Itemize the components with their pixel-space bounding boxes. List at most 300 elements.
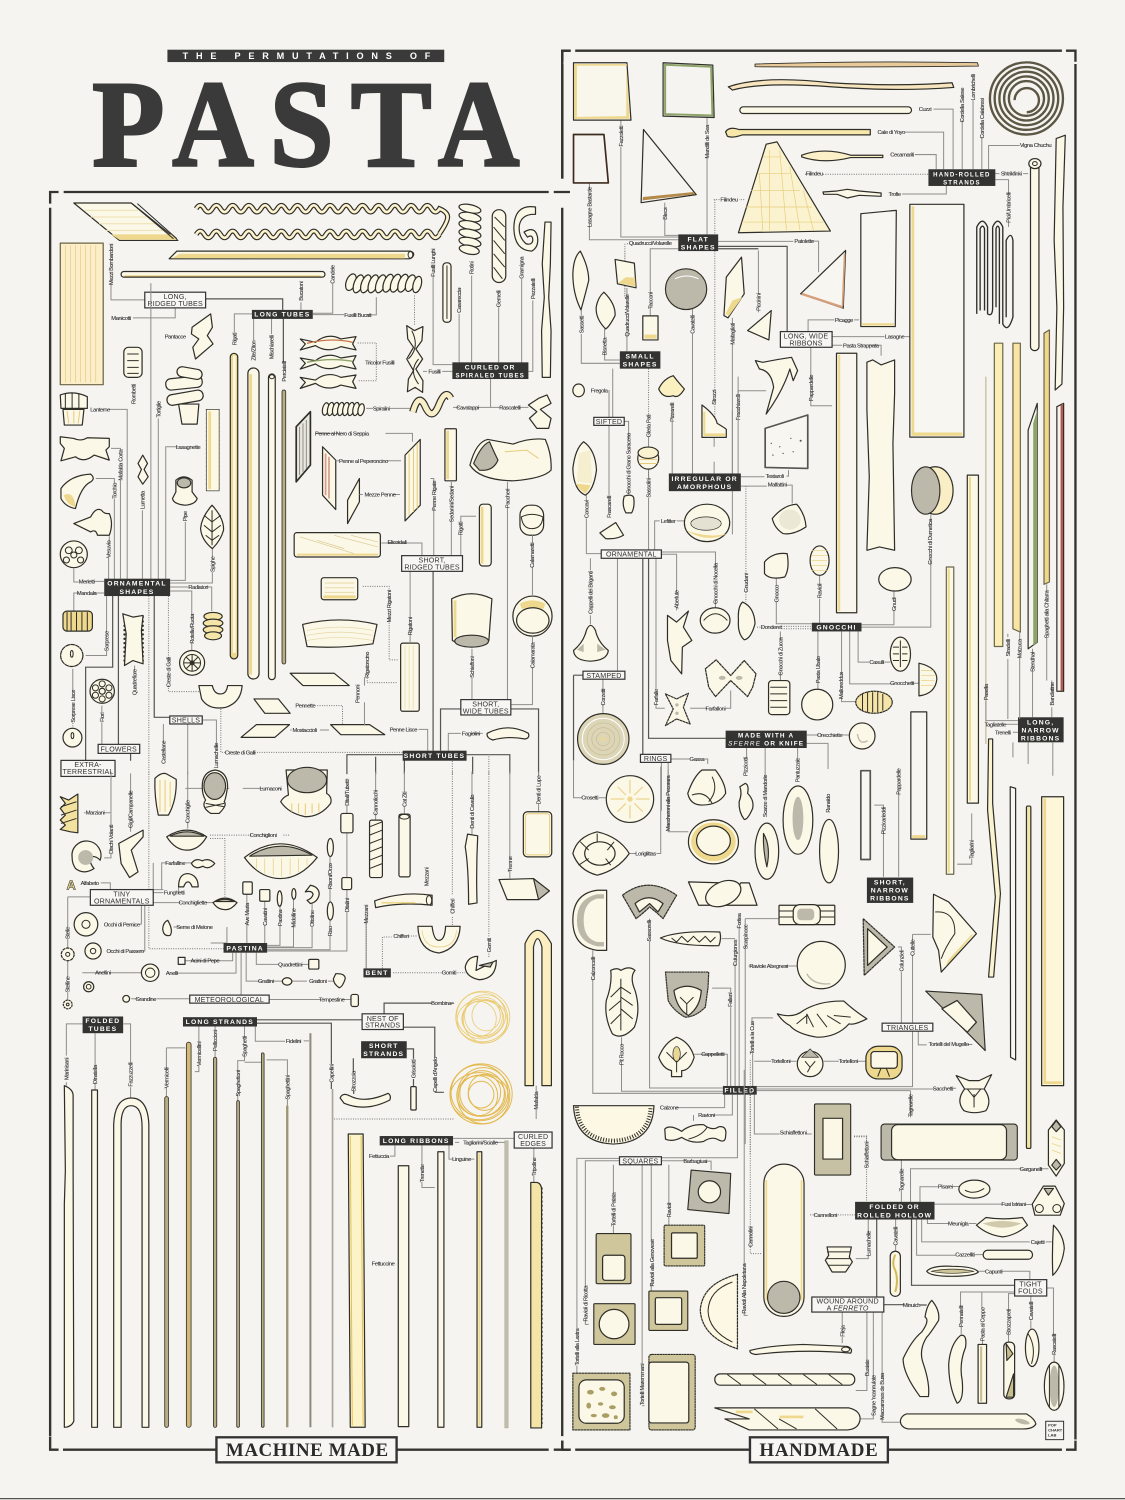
pasta: malloreddus xyxy=(856,691,892,713)
label: long wide ribbons: RIBBONS xyxy=(789,340,823,347)
pasta: calzoncelli D xyxy=(573,890,607,950)
labels: lower left: Capelli d'Angelo xyxy=(433,1057,439,1092)
pasta: raviole abegnesi xyxy=(797,941,845,989)
strands: dinatella xyxy=(92,1090,97,1427)
label: curled or spiraled tubes: SPIRALED TUBES xyxy=(455,373,525,379)
dotted: filindeu xyxy=(625,174,928,417)
pasta: gnocchetti xyxy=(919,663,937,696)
label: bent xyxy=(363,968,391,977)
pasta: alfabeto: A xyxy=(66,878,76,893)
labels: lower left: Stelline xyxy=(66,976,72,992)
labels: handmade bottom: Tortelli alla Lastra xyxy=(575,1328,581,1366)
labels: handmade bottom: Sagne 'ncannulate xyxy=(871,1375,877,1416)
panel: handmade upper middle xyxy=(573,330,1064,874)
labels: handmade top: Cuzzi xyxy=(919,107,931,113)
strand: cale xyxy=(726,128,870,137)
pasta: gnudani xyxy=(738,602,755,640)
pasta: manicotti xyxy=(60,243,103,385)
labels: upper left: Bucatoni xyxy=(299,282,305,301)
labels: lower left: Spaghettoni xyxy=(236,1070,242,1096)
ribbon: picagge xyxy=(861,210,896,327)
dotted: filled xyxy=(750,1095,867,1154)
label: nest of strands xyxy=(362,1014,403,1030)
labels: handmade bottom: Cannolini xyxy=(748,1227,754,1247)
connectors: filled xyxy=(574,760,972,1144)
labels: upper left: Fusilli xyxy=(428,369,441,375)
labels: handmade top: Sassetti xyxy=(579,316,585,333)
label: meteorological: METEOROLOGICAL xyxy=(195,997,264,1004)
pasta: busiate xyxy=(715,1374,855,1385)
label: bent: BENT xyxy=(365,970,389,977)
pasta: sorprese lisce xyxy=(63,728,82,747)
strands: marinisani xyxy=(64,1086,74,1427)
dark connector: flat shapes xyxy=(718,246,787,332)
labels: middle left: Elicoidali xyxy=(387,540,406,546)
pasta: sassorelli fan xyxy=(623,885,677,919)
connectors: hand-rolled xyxy=(808,100,1028,406)
label: irregular or amorphous: IRREGULAR OR xyxy=(671,476,738,483)
labels: handmade bottom: Fileja xyxy=(840,1324,846,1337)
labels: middle left: Penne al Nero di Seppia xyxy=(315,431,370,437)
dotted: lumaconi and conchiglie xyxy=(149,772,489,973)
pasta: pizzarelli xyxy=(659,376,684,397)
labels: lower left: Grandine xyxy=(135,997,156,1003)
dark connectors: folded to ferreto xyxy=(877,1220,1015,1305)
label: tight folds xyxy=(1015,1280,1047,1296)
pasta: fagiolini xyxy=(487,728,529,740)
labels: middle left: Quadrefiore xyxy=(133,669,139,695)
labels: handmade top: Cale di Yoyo xyxy=(878,130,905,136)
label: made with a sferre or knife: MADE WITH A xyxy=(738,733,794,740)
pasta: tagnarelle xyxy=(881,1124,1017,1160)
pasta: concavi xyxy=(573,442,597,495)
pasta: rigatoni xyxy=(479,504,491,566)
labels: middle left: Mostaccioli xyxy=(293,728,317,734)
pasta: tortelli alla lastra xyxy=(573,1373,630,1430)
ribbon: stradelli xyxy=(994,343,1003,646)
labels: handmade lower middle: Tortelli del Mugello xyxy=(929,1042,969,1048)
labels: middle left: Lumetta xyxy=(140,490,146,509)
labels: handmade lower middle: Culurgiones xyxy=(733,939,739,966)
pasta: gnocchi di zucca xyxy=(769,681,790,715)
pasta: bucatoni tube xyxy=(169,251,414,259)
labels: lower left: Conchigliette xyxy=(179,901,207,907)
labels: middle left: Tortiglie xyxy=(156,401,162,417)
strand: second xyxy=(728,80,954,90)
pasta: pantacce xyxy=(191,314,213,359)
pasta: ravioli oval xyxy=(810,546,829,575)
labels: handmade bottom xyxy=(575,1131,1058,1420)
ribbon: fettuccine xyxy=(398,1166,409,1427)
label: folded or rolled hollow: ROLLED HOLLOW xyxy=(857,1213,932,1220)
pasta: tortiglie stack xyxy=(165,366,204,424)
title: PASTA xyxy=(92,56,519,192)
labels: lower left: Anelli xyxy=(166,971,178,977)
labels: middle left: Sorprese xyxy=(105,631,111,651)
pasta: cappelletti xyxy=(659,1037,694,1077)
labels: handmade bottom: Schiaffettoni xyxy=(780,1131,807,1137)
labels: handmade bottom: Maccarones de Busa xyxy=(880,1372,886,1420)
label: long narrow ribbons: LONG, xyxy=(1027,719,1054,726)
ribbon: stendhal xyxy=(1028,403,1037,649)
pasta: mezzi rigatoni xyxy=(321,578,358,600)
label: wound around a ferreto: WOUND AROUND xyxy=(816,1298,879,1305)
pasta: rombetti xyxy=(124,347,142,377)
panel: machine made long ribbons xyxy=(348,1132,552,1428)
dotted: short tubes xyxy=(452,754,489,774)
pasta: rascatelli curl xyxy=(528,395,551,428)
labels: handmade upper middle: Gnocchi di Dumetica xyxy=(928,518,934,565)
ribbon: fettuccia xyxy=(348,1134,365,1427)
label: flat shapes: FLAT xyxy=(687,236,709,243)
label: long strands xyxy=(183,1017,257,1027)
pasta: barbagiuai xyxy=(688,1170,731,1214)
label: stamped: STAMPED xyxy=(586,673,622,680)
labels: handmade upper middle: Gnudi xyxy=(892,598,898,611)
pasta: trenne xyxy=(499,879,549,900)
labels: handmade top xyxy=(579,74,1051,422)
labels: middle left: Cavatappi xyxy=(456,405,479,411)
labels: handmade lower middle: Calzone xyxy=(660,1106,679,1112)
pasta: cavatappi xyxy=(413,395,451,414)
labels: middle left: Pennoni xyxy=(356,685,362,703)
pasta: fiori xyxy=(90,679,114,703)
pasta: pasta strappata xyxy=(867,360,895,550)
panel: machine made lower xyxy=(60,767,552,1427)
pasta: pezzatelli xyxy=(542,222,551,377)
dotted link: fusilli xyxy=(358,296,415,381)
pasta: candele tube xyxy=(121,271,325,277)
pasta: strozzola xyxy=(340,1093,390,1107)
labels: middle left: Fagiolini xyxy=(462,731,480,737)
labels: upper left: Tricolor Fusilli xyxy=(365,360,394,366)
labels: lower left: Strozzola xyxy=(352,1070,358,1091)
pasta: tortelli maremmani xyxy=(649,1354,695,1430)
labels: lower left: Spaghetti xyxy=(242,1036,249,1057)
labels: handmade upper middle: Malfattini xyxy=(768,483,787,488)
pasta: denti di cavallo xyxy=(465,834,478,904)
strands: spaghettoni xyxy=(237,1101,239,1427)
label: long narrow ribbons: RIBBONS xyxy=(1021,735,1060,742)
strands: fazzuzzelli xyxy=(114,1098,149,1427)
label: ornamental shapes xyxy=(104,579,170,596)
ribbon: lasagne xyxy=(910,204,964,437)
labels: middle left: Mafalda Corta xyxy=(118,449,124,481)
pasta: lasagna bastarda xyxy=(574,135,608,183)
labels: handmade lower middle: Pappardelle xyxy=(897,768,903,795)
pasta: sassetti xyxy=(573,251,589,310)
dark connector: long strands xyxy=(257,1003,454,1094)
pasta: calamarata xyxy=(513,596,552,636)
labels: handmade top: Shtrikfinki xyxy=(1001,172,1022,178)
pasta: schiaffoni xyxy=(452,594,492,647)
connectors: shells xyxy=(102,706,216,774)
labels: handmade lower middle: Sacchetti xyxy=(933,1086,953,1092)
pasta: fusilli bucati xyxy=(344,272,423,294)
labels: handmade top: Filindeu xyxy=(720,198,738,204)
labels: lower left: Ditalini xyxy=(345,898,351,912)
labels: handmade upper middle: Spaghetti alla Chitarra xyxy=(1045,589,1051,638)
label: small shapes: SMALL xyxy=(626,353,655,360)
pasta: cajetti xyxy=(1052,1225,1064,1275)
labels: lower left: Denti di Lupo xyxy=(537,776,543,804)
labels: handmade lower middle: Maccheroni alla Pecorara xyxy=(666,774,672,831)
label: nest of strands: NEST OF xyxy=(367,1016,399,1023)
labels: upper left: Zite/Ziton xyxy=(252,340,258,361)
panel frame: bottom of machine made xyxy=(50,1437,570,1450)
pasta: cavatelli xyxy=(890,1251,900,1296)
label: wound around a ferreto: A FERRETO xyxy=(827,1305,869,1312)
strands: fidelini xyxy=(309,1033,311,1427)
pasta: culurgiones xyxy=(660,932,721,946)
label: nest of strands: STRANDS xyxy=(365,1023,400,1030)
labels: handmade top: Trofie xyxy=(889,192,901,198)
pasta: casulli xyxy=(890,637,911,671)
title: PASTA: A xyxy=(172,56,254,192)
label: machine made: MACHINE MADE xyxy=(226,1440,388,1461)
pasta: fusilli lunghi xyxy=(196,205,448,238)
labels: upper left: Mischiarelli xyxy=(270,335,276,359)
labels: lower left: Trenne xyxy=(508,856,514,872)
labels: handmade bottom: Cazzelliti xyxy=(955,1253,975,1259)
labels: handmade top: Maltagliati xyxy=(730,323,736,345)
pasta: corzetti xyxy=(578,714,629,764)
label: long wide ribbons xyxy=(780,332,832,347)
dark connectors: short tubes xyxy=(347,571,539,774)
labels: handmade upper middle: Gassa xyxy=(690,757,705,763)
label: ornamental shapes: SHAPES xyxy=(120,589,154,596)
labels: handmade top: Piccinini xyxy=(756,293,762,311)
labels: lower left: Marziani xyxy=(86,811,105,817)
title: PASTA: A xyxy=(438,56,519,192)
label: short strands: SHORT xyxy=(369,1043,399,1050)
pasta: ravioli xyxy=(664,1225,705,1266)
panel: handmade bottom xyxy=(573,1060,1064,1440)
pasta: spiral xyxy=(990,62,1063,135)
labels: handmade lower middle: Ranaldo xyxy=(826,794,832,813)
labels: middle left: Penne Lisce xyxy=(390,727,417,733)
ribbon: red xyxy=(1057,403,1064,691)
pasta: quadrefiore xyxy=(123,614,143,666)
pasta: ravioni xyxy=(665,1125,726,1142)
pasta: ravioli napoletana half moon xyxy=(700,1274,737,1349)
labels: handmade bottom: Busiate xyxy=(865,1359,871,1376)
labels: lower left: Mezzani xyxy=(424,868,430,886)
labels: lower left: Alfabeto xyxy=(81,881,99,887)
pasta: pici folds xyxy=(977,221,1013,328)
pasta: sagne ncannulate xyxy=(715,1408,860,1430)
pasta: fregola xyxy=(573,384,584,397)
pasta: lumaconi xyxy=(281,767,331,817)
labels: upper left: Perciatelli xyxy=(282,361,288,382)
labels: ribbons: Fettuccia xyxy=(369,1154,390,1160)
pasta: conchiglie snail xyxy=(202,770,228,813)
label: short tubes: SHORT TUBES xyxy=(404,753,465,760)
labels: handmade lower middle: Ravioni xyxy=(698,1113,715,1119)
labels: handmade bottom: Minuich xyxy=(903,1303,920,1309)
pasta: loriglittas xyxy=(573,832,629,875)
labels: handmade bottom: Ravioli di Ricotta xyxy=(583,1285,589,1322)
labels: lower left: Cannolicchi xyxy=(374,790,380,815)
pasta: fusilli xyxy=(407,326,423,392)
labels: ribbons xyxy=(369,1140,538,1268)
labels: lower left: Vermicellini xyxy=(197,1042,203,1066)
labels: middle left: Fiori xyxy=(100,713,106,722)
labels: upper left: Mezzi Bombardoni xyxy=(109,244,115,285)
ribbon: pasella xyxy=(984,377,987,744)
label: folded or rolled hollow xyxy=(855,1202,935,1220)
label: handmade: HANDMADE xyxy=(759,1440,878,1461)
labels: handmade lower middle: Pit Rocco xyxy=(620,1044,626,1065)
pasta: spighe leaf xyxy=(201,505,224,549)
pasta: minuich xyxy=(903,1300,939,1397)
label: short ridged tubes: SHORT, xyxy=(419,558,446,565)
labels: handmade bottom: Capunti xyxy=(985,1269,1002,1275)
labels: lower left: Cavatini xyxy=(263,908,269,926)
labels: upper left: Manicotti xyxy=(111,316,131,322)
labels: handmade top: Cecamariti xyxy=(890,153,914,159)
labels: lower left: Capellini xyxy=(329,1064,335,1082)
label: rings: RINGS xyxy=(644,756,667,763)
labels: handmade bottom: Cavatelli xyxy=(1029,1302,1035,1320)
labels: handmade upper middle: Aberlute xyxy=(675,590,681,608)
connectors: short tubes xyxy=(290,433,532,751)
pasta: grisolotti xyxy=(411,1087,416,1110)
pasta: maccheroni alla pecorara ring xyxy=(688,820,738,864)
labels: handmade top: Cavatelli xyxy=(691,315,697,334)
dotted: gnudani xyxy=(649,469,812,629)
labels: middle left: Lumachelle xyxy=(214,743,220,768)
pasta: stelline xyxy=(63,1000,72,1009)
title: PASTA: P xyxy=(92,56,164,192)
labels: handmade bottom: Ravioli Alla Napoletana xyxy=(742,1263,748,1314)
label: triangles: TRIANGLES xyxy=(886,1025,929,1032)
label: flat shapes xyxy=(678,234,718,251)
pasta: penne lisce xyxy=(331,725,385,735)
labels: handmade top: Pasta Strappata xyxy=(843,343,880,349)
labels: handmade top: Picagge xyxy=(835,318,853,324)
title: PASTA: S xyxy=(270,56,333,192)
strands: pelliccioni xyxy=(213,1057,217,1427)
labels: handmade bottom: Lumachelle xyxy=(866,1231,872,1256)
label: stamped xyxy=(583,671,625,680)
labels: handmade lower middle: Raviole Abegnesi xyxy=(749,964,788,970)
pasta: pastina shapes xyxy=(243,838,333,920)
label: ornamental shapes: ORNAMENTAL xyxy=(107,581,167,588)
pasta: sorprese xyxy=(61,644,83,667)
label: extra-terrestrial: TERRESTRIAL xyxy=(62,769,114,776)
labels: middle left: Pipe xyxy=(183,511,189,521)
labels: handmade top: Pici/Umbricelli xyxy=(1007,193,1013,223)
labels: lower left: Grattini xyxy=(258,979,274,985)
label: curled or spiraled tubes xyxy=(452,362,528,379)
pasta: gramigna xyxy=(514,207,538,251)
labels: handmade lower middle: Pizzicarieddi xyxy=(881,807,888,834)
pasta: cuttelle xyxy=(933,894,976,972)
labels: handmade upper middle: Trenelli xyxy=(995,730,1011,736)
ribbon: pizzicarieddi xyxy=(861,771,870,860)
labels: middle left: Spiralini xyxy=(373,406,390,412)
label: short narrow ribbons: RIBBONS xyxy=(870,896,910,903)
pasta: tortellini small xyxy=(797,1049,823,1077)
pasta: gomiti xyxy=(465,956,496,980)
labels: handmade lower middle: Colunzieli xyxy=(899,950,905,972)
pasta: cazzelliti xyxy=(983,1250,1033,1259)
panel: machine made upper xyxy=(60,202,551,680)
labels: handmade bottom: Pennatelli xyxy=(959,1306,965,1327)
labels: handmade bottom: Garganelli xyxy=(1020,1167,1042,1173)
pasta: garganelli xyxy=(1048,1120,1064,1176)
dotted: nest to ribbons xyxy=(334,1118,454,1121)
panel frame: handmade xyxy=(562,51,1075,1439)
pasta: colunzieli triangle xyxy=(863,919,895,975)
labels: handmade top: Fazzoletti xyxy=(619,126,625,146)
label: folded tubes: TUBES xyxy=(88,1026,117,1033)
panel: title area xyxy=(92,50,519,192)
pasta: spirali xyxy=(321,402,365,416)
pasta: cut ziti U xyxy=(525,930,551,1086)
pasta: mezze penne xyxy=(348,478,359,524)
labels: handmade top: Quadrucci/Volarelle xyxy=(629,241,672,247)
labels: handmade upper middle: Stendhal xyxy=(1031,652,1037,672)
pasta: patolette xyxy=(801,250,846,308)
label: irregular or amorphous xyxy=(669,473,741,491)
label: short wide tubes: SHORT, xyxy=(472,702,499,709)
connector: tiny ornamentals xyxy=(68,863,351,1000)
labels: lower left: Vermicelli xyxy=(164,1068,170,1088)
pasta: marziani xyxy=(60,794,78,833)
pasta: capunti xyxy=(927,1266,978,1276)
label: hand-rolled strands xyxy=(928,169,995,186)
ribbon: pappardelle short xyxy=(911,712,927,839)
labels: upper left: Rigati xyxy=(232,333,238,345)
pasta: fusi istriani xyxy=(1032,1186,1064,1215)
pasta: ditali xyxy=(341,813,353,890)
labels: upper left: Candele xyxy=(331,265,337,284)
labels: handmade upper middle: Gnocchi di Grano Saraceno xyxy=(627,433,633,494)
label: short wide tubes xyxy=(461,700,511,715)
labels: lower left: Dinatella xyxy=(93,1064,99,1084)
pasta: mostaccioli xyxy=(241,725,289,737)
labels: handmade upper middle: Corzetti xyxy=(601,689,607,706)
pasta: elicoidali xyxy=(294,533,380,557)
labels: handmade bottom: Rascatelli xyxy=(1052,1334,1058,1355)
labels: ribbons: Tagliarini/Scialle xyxy=(463,1140,498,1146)
labels: lower left: Chifferi xyxy=(393,934,409,940)
pasta: rotini xyxy=(458,202,482,256)
long tubes: rigati xyxy=(230,353,238,659)
labels: lower left: Chifferi xyxy=(450,899,456,914)
labels: middle left: Creste di Galli xyxy=(225,750,255,756)
labels: lower left: Marinisani xyxy=(64,1058,70,1080)
pasta: mandala barrel xyxy=(63,611,92,631)
labels: middle left xyxy=(71,401,537,768)
pasta: tortelloni xyxy=(866,1046,902,1079)
pasta: mandilli de sea xyxy=(663,63,714,117)
pasta: fallani xyxy=(665,972,709,1017)
long tubes: zite xyxy=(248,368,259,679)
labels: handmade top: Bisnetta xyxy=(603,337,609,355)
label: curled edges: EDGES xyxy=(520,1141,546,1148)
labels: handmade bottom: Tortelli Maremmani xyxy=(640,1364,646,1405)
labels: middle left: Mezze Penne xyxy=(365,493,396,499)
pasta: lasagnette xyxy=(206,409,219,491)
labels: middle left: Spighe xyxy=(210,556,216,572)
labels: handmade upper middle: Lefitter xyxy=(661,519,676,525)
pasta: belt xyxy=(779,905,835,925)
labels: handmade bottom: Cajetti xyxy=(1031,1240,1045,1246)
labels: lower left: Pastina xyxy=(278,909,284,926)
